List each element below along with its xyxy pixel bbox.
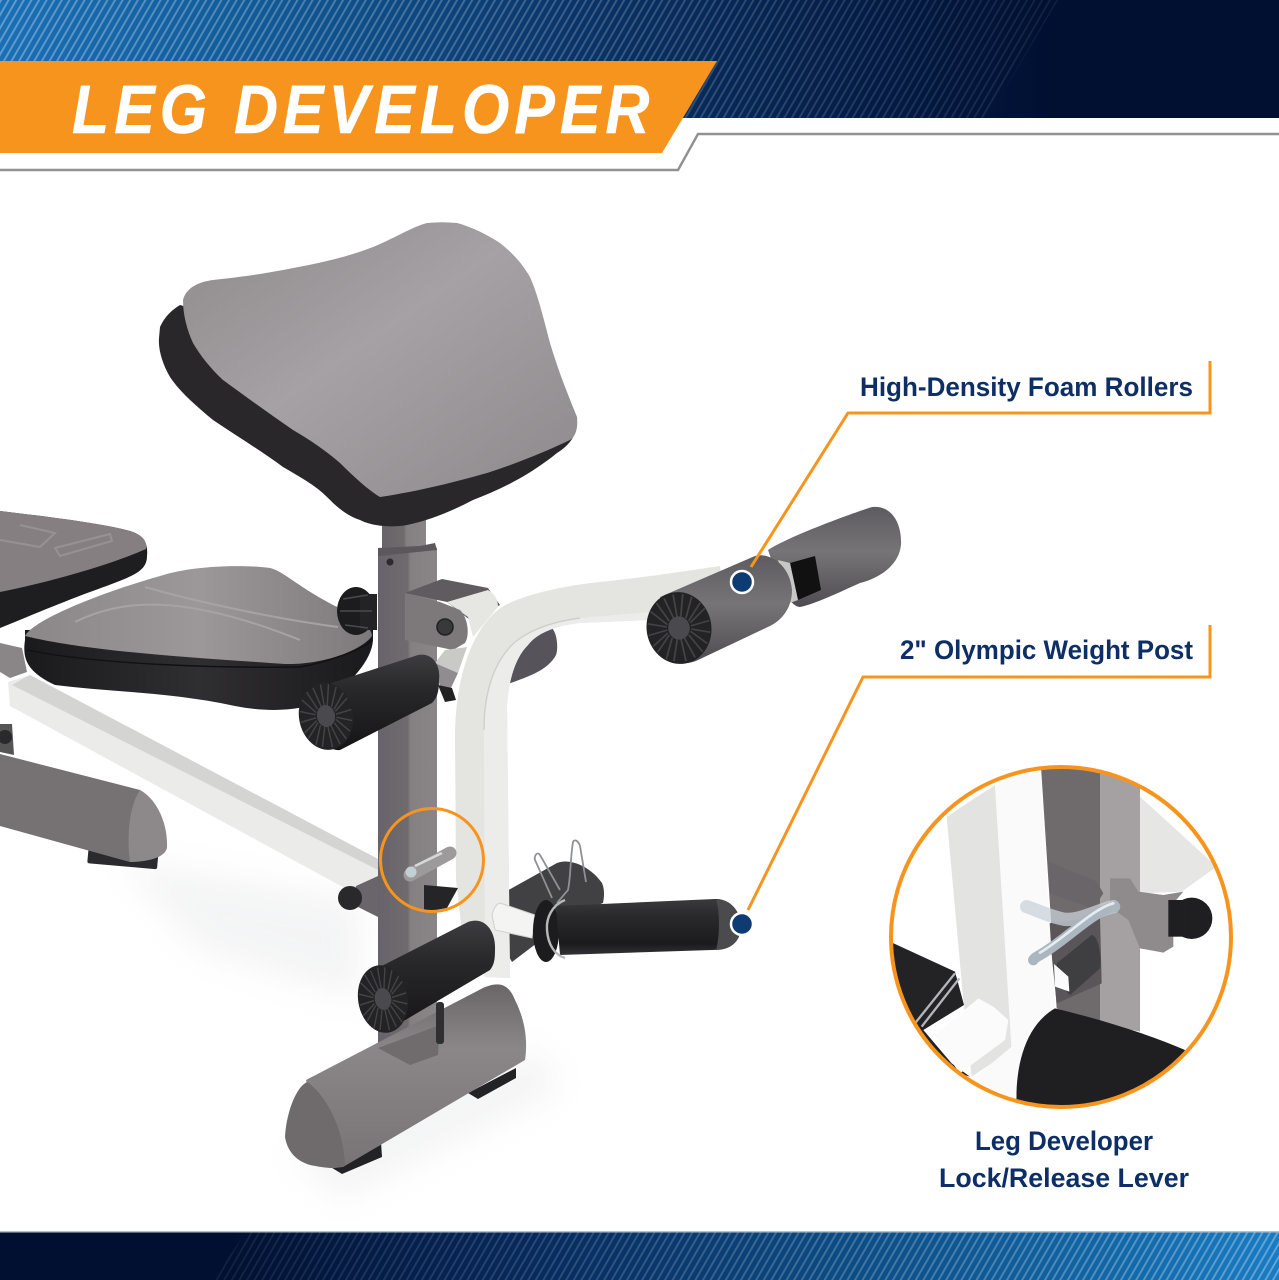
inset circle: lock release detail [889,765,1233,1109]
label: olympic weight post: 2" Olympic Weight Post [900,635,1193,665]
diagonal white rail [8,675,378,892]
inset: left black roller [887,942,970,1077]
rear gray cone behind post [505,862,604,962]
far high-density roller [768,507,901,607]
header underline strokes [0,134,1279,170]
lever axle [492,903,535,938]
under bracket stub [435,647,467,673]
front base foot [285,984,526,1174]
inset: gray sleeve and cylinders [1054,888,1104,995]
left black roller [294,655,439,754]
white L-shaped lever arm [455,566,725,978]
pivot bracket [405,579,500,702]
spring collar [547,900,565,958]
seat-mount tilt pad edge [0,643,27,678]
inset: white axle [954,998,1008,1072]
inset: spring clip [915,973,959,1027]
inset: gray post [1041,767,1140,1032]
header band [0,0,1279,118]
caption: leg developer lock release lever: Leg Developer [975,1126,1153,1156]
caption: leg developer lock release lever: Lock/Release Lever [939,1163,1189,1193]
pivot bolt [437,619,453,635]
seat adjustment knob [337,587,377,635]
inset: bracket and knob [1110,878,1212,953]
marker dot: foam roller [731,571,753,593]
roller pleated end [353,961,413,1037]
bracket plate [405,593,468,650]
bracket cup [405,579,500,620]
label: high-density foam rollers: High-Density Foam Rollers [860,372,1193,402]
weight post [533,899,741,962]
floor shadows [120,860,560,1200]
small highlight circle [380,808,484,912]
marker dot: weight post [731,913,753,935]
footer band [0,1231,1279,1280]
main upright post [378,518,437,1048]
near high-density roller [641,555,792,669]
inset: front black roller [1016,1008,1185,1105]
rear bench seat [0,511,147,628]
back pad [159,222,577,526]
inset: lock pin [1027,903,1115,960]
front adjustable seat pad [24,566,373,710]
plate clips [535,840,586,903]
inset: diagonal white rail [1140,797,1217,893]
rail pivot knob [338,876,380,918]
caption: leg developer lock release lever [939,1126,1189,1193]
title: LEG DEVELOPER [72,70,655,148]
white pivot tube [447,590,498,637]
lower black roller [353,921,495,1037]
roller pleated end [294,678,358,754]
product illustration: bench with leg developer [0,222,901,1200]
inset: white lever [946,785,1052,1076]
inset ring [891,767,1231,1107]
roller pleated end [641,587,717,669]
callout: foam rollers leader [751,361,1210,567]
title banner [0,61,717,153]
rear roller behind lever [500,628,557,684]
lock release lever pin [406,853,458,912]
callout: weight post leader [748,625,1210,910]
left base foot [0,724,167,869]
